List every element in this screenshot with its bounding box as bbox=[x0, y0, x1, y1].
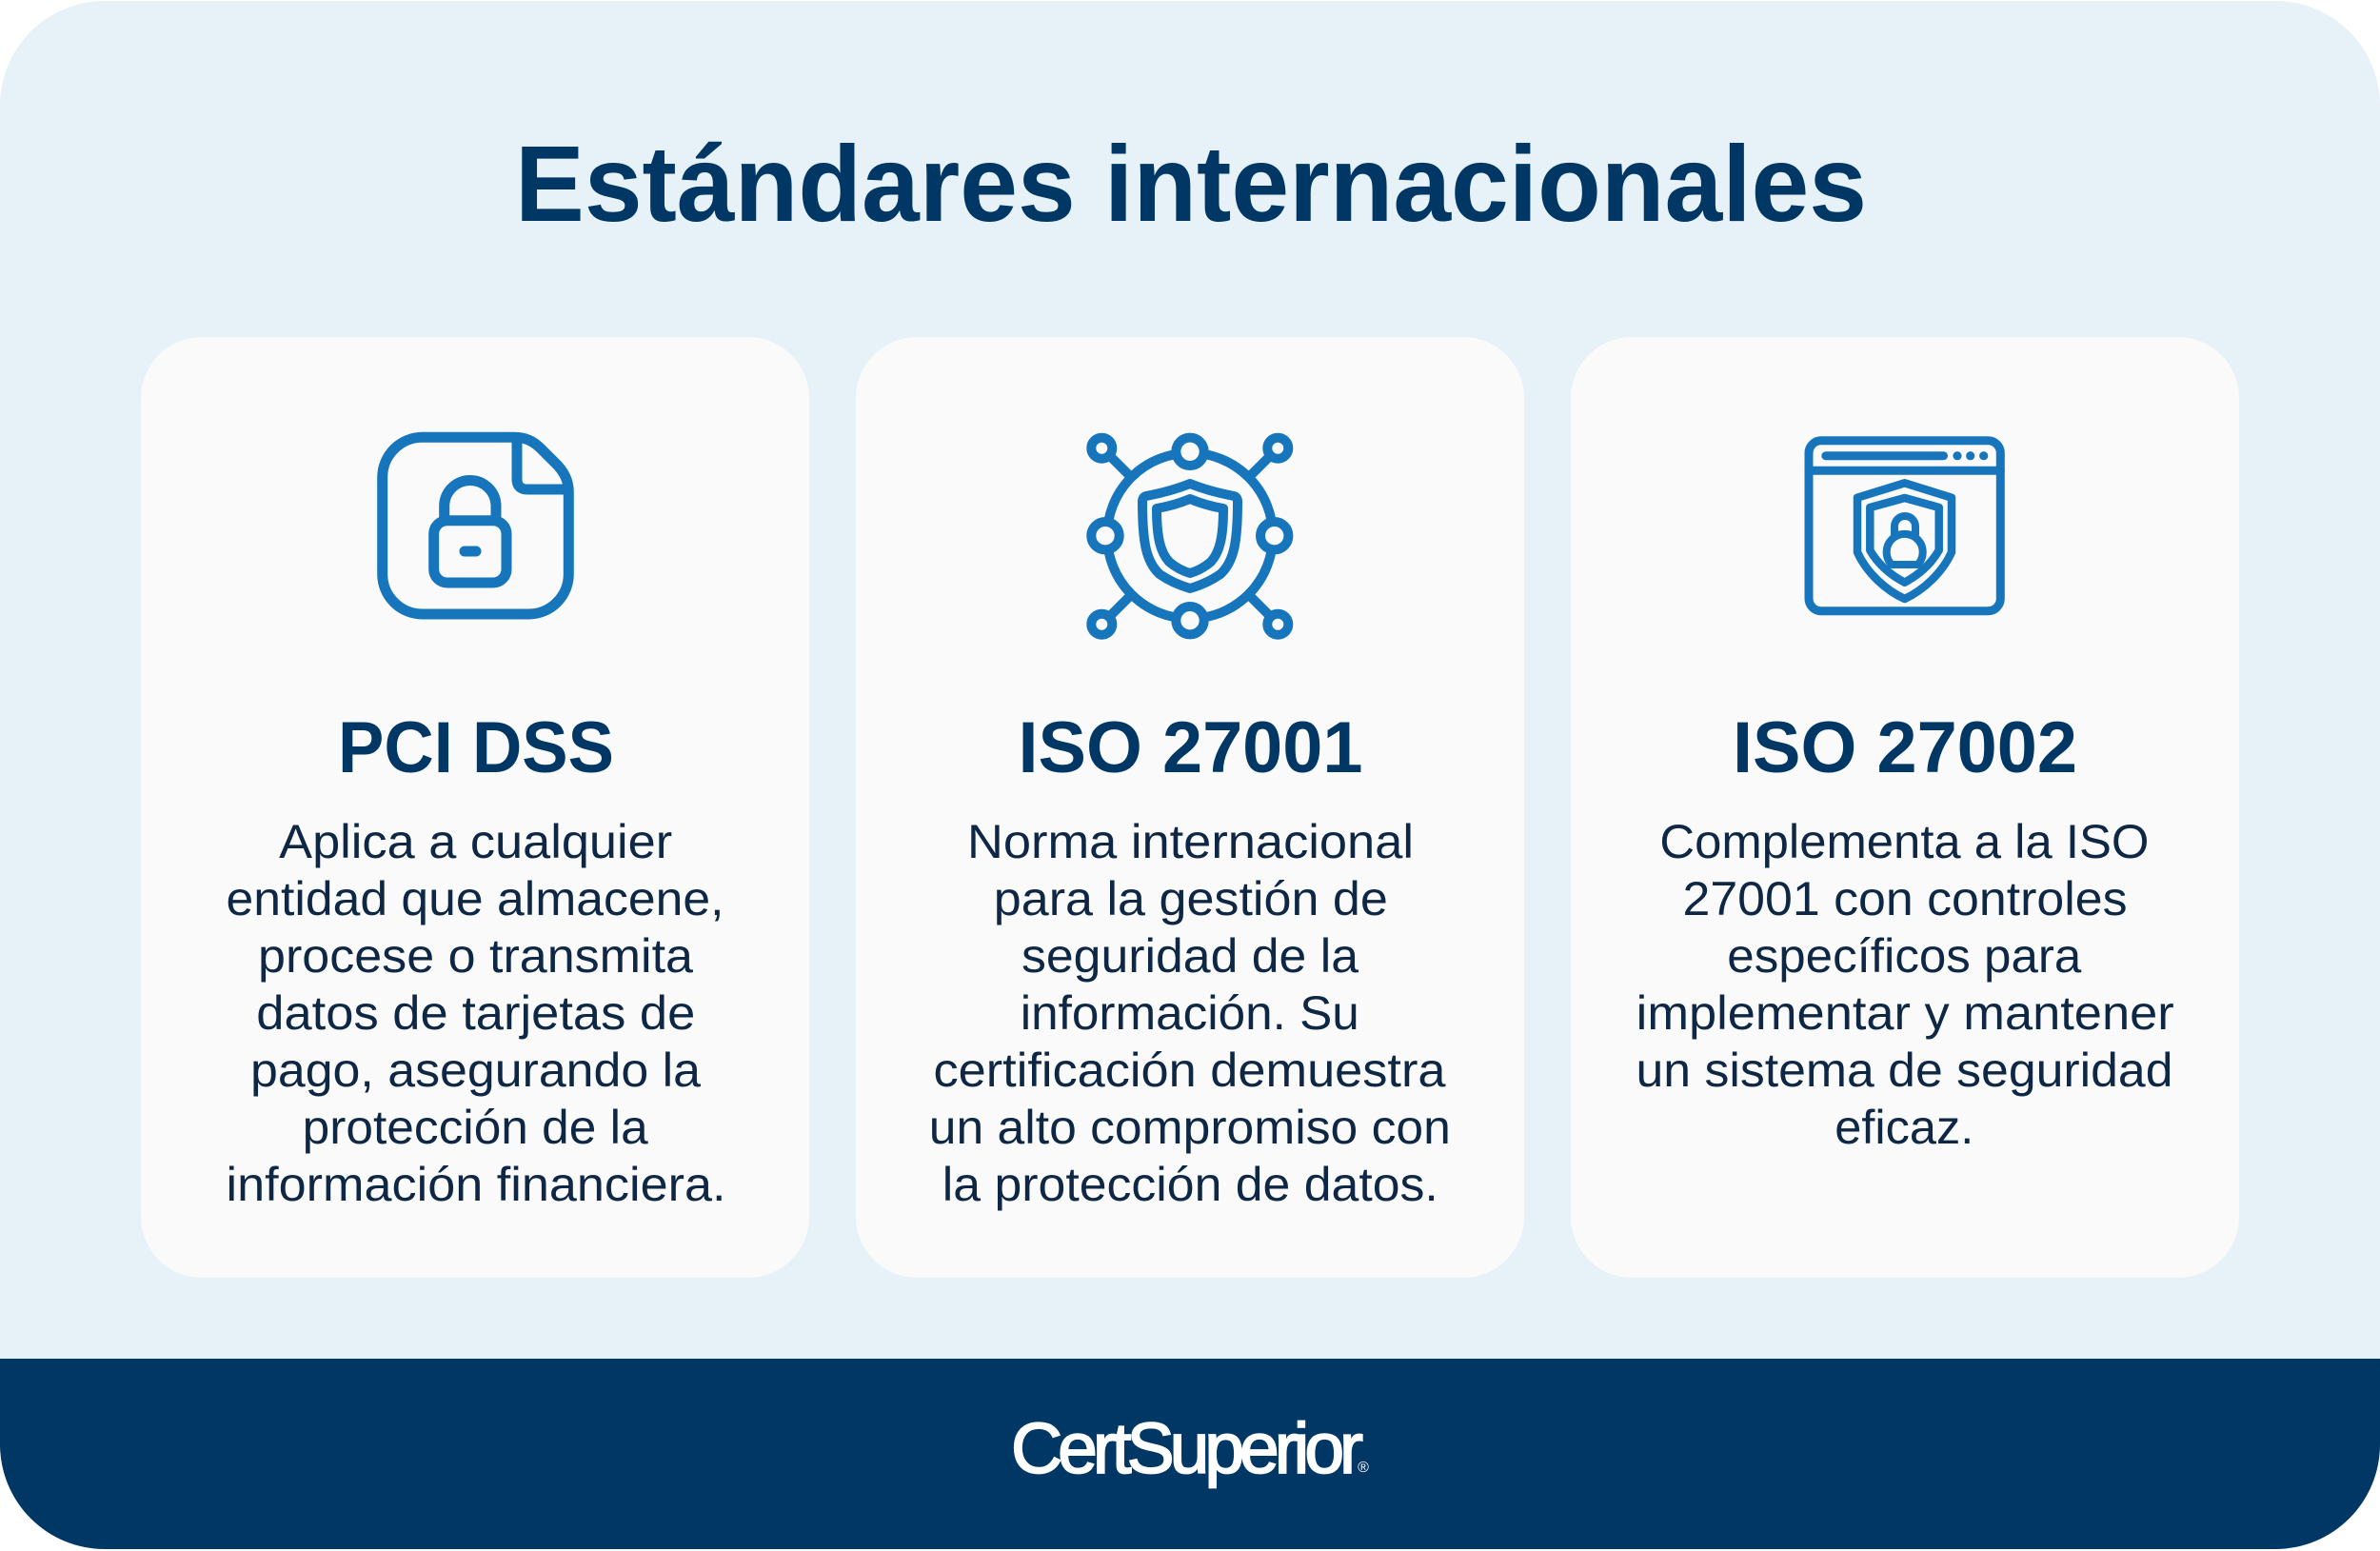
body text: ISO 27001: la protección de datos. bbox=[942, 1158, 1438, 1211]
body text: PCI DSS bbox=[227, 815, 725, 1211]
body text: ISO 27001: para la gestión de bbox=[994, 872, 1388, 925]
body text: PCI DSS: información financiera. bbox=[227, 1158, 725, 1211]
body text: ISO 27002: eficaz. bbox=[1835, 1101, 1973, 1154]
body text: PCI DSS: protección de la bbox=[303, 1101, 648, 1154]
card background: PCI DSS bbox=[141, 337, 809, 1278]
body text: ISO 27001 bbox=[929, 815, 1451, 1211]
card background: ISO 27002 bbox=[1571, 337, 2239, 1278]
body text: ISO 27001: seguridad de la bbox=[1021, 929, 1359, 983]
body text: ISO 27002: específicos para bbox=[1727, 929, 2081, 983]
icon: shield network bbox=[1091, 438, 1288, 635]
title: Estándares internacionales bbox=[515, 124, 1867, 244]
body text: PCI DSS: pago, asegurando la bbox=[250, 1044, 701, 1097]
heading: PCI DSS: PCI DSS bbox=[338, 707, 614, 788]
heading: ISO 27001: ISO 27001 bbox=[1019, 707, 1363, 788]
logo: CertSuperior: CertSuperior bbox=[1011, 1408, 1363, 1488]
body text: ISO 27001: Norma internacional bbox=[967, 815, 1414, 868]
body text: ISO 27002: Complementa a la ISO bbox=[1659, 815, 2149, 868]
panel: ISO 27001 bbox=[856, 337, 1524, 1278]
body text: PCI DSS: Aplica a cualquier bbox=[279, 815, 672, 868]
logo: CertSuperior: ® bbox=[1358, 1460, 1369, 1476]
card background: ISO 27001 bbox=[856, 337, 1524, 1278]
heading: ISO 27002: ISO 27002 bbox=[1733, 707, 2077, 788]
body text: PCI DSS: procese o transmita bbox=[258, 929, 693, 983]
body text: ISO 27002: 27001 con controles bbox=[1683, 872, 2127, 925]
body text: ISO 27001: certificación demuestra bbox=[933, 1044, 1446, 1097]
body text: PCI DSS: entidad que almacene, bbox=[227, 872, 724, 925]
body text: ISO 27001: un alto compromiso con bbox=[929, 1101, 1451, 1154]
icon: browser shield lock bbox=[1809, 441, 2000, 611]
panel: PCI DSS bbox=[141, 337, 809, 1278]
body text: PCI DSS: datos de tarjetas de bbox=[256, 986, 695, 1040]
icon: locked document bbox=[383, 437, 568, 614]
body text: ISO 27001: información. Su bbox=[1021, 986, 1359, 1040]
body text: ISO 27002: un sistema de seguridad bbox=[1636, 1044, 2172, 1097]
body text: ISO 27002 bbox=[1636, 815, 2174, 1154]
body text: ISO 27002: implementar y mantener bbox=[1636, 986, 2174, 1040]
panel: ISO 27002 bbox=[1571, 337, 2239, 1278]
footer band bbox=[0, 1359, 2380, 1549]
